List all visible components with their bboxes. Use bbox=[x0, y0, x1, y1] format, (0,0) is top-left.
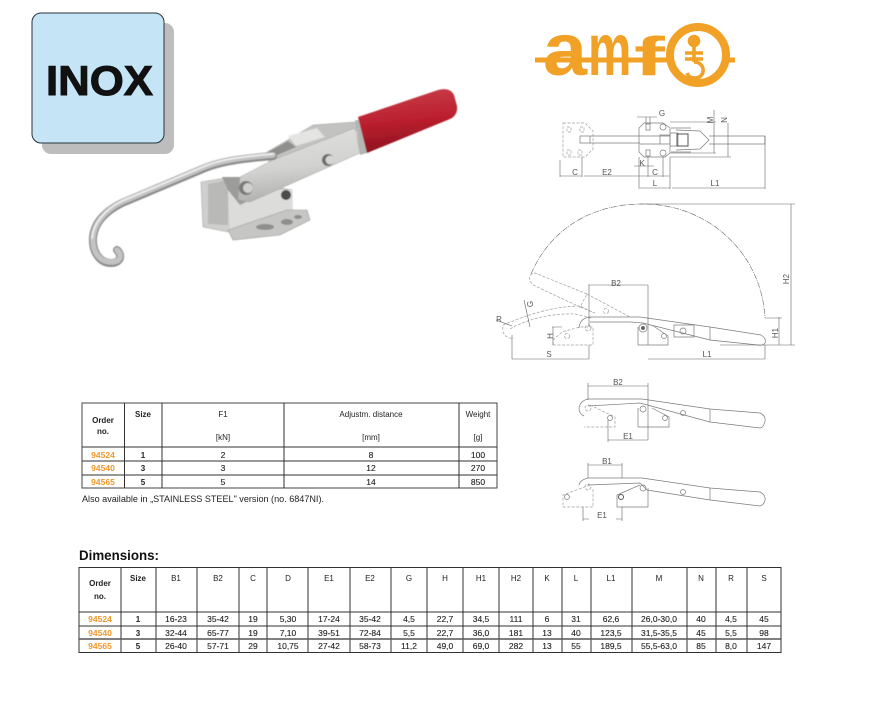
drawing: side view with swing arc bbox=[496, 204, 795, 359]
table: dimensions: R bbox=[728, 574, 734, 583]
table: dimensions: 55,5-63,0 bbox=[641, 641, 677, 651]
table: dimensions: L bbox=[574, 574, 579, 583]
table: dimensions: G bbox=[406, 574, 412, 583]
table: dimensions: 147 bbox=[757, 641, 771, 651]
table: specifications: 1 bbox=[141, 451, 146, 460]
table: dimensions: 6 bbox=[545, 614, 550, 624]
table: dimensions: 98 bbox=[759, 628, 769, 638]
table: specifications: 3 bbox=[221, 463, 226, 473]
drawing: top view: M bbox=[706, 116, 715, 123]
drawing: top view: K bbox=[639, 159, 645, 168]
table: dimensions: 85 bbox=[696, 641, 706, 651]
table: dimensions: 72-84 bbox=[359, 628, 381, 638]
drawing: top view: N bbox=[720, 117, 729, 123]
table: dimensions: 32-44 bbox=[165, 628, 187, 638]
heading: dimensions: Dimensions: bbox=[79, 547, 159, 563]
table: dimensions: 181 bbox=[509, 628, 523, 638]
table: specifications: Adjustm. distance bbox=[339, 410, 403, 419]
table: dimensions: 29 bbox=[248, 641, 258, 651]
table: dimensions bbox=[79, 567, 781, 652]
table: dimensions: 123,5 bbox=[600, 628, 622, 638]
table: dimensions: 39-51 bbox=[318, 628, 340, 638]
table: specifications: [kN] bbox=[216, 433, 230, 442]
drawing: top view: C bbox=[572, 168, 578, 177]
table: dimensions: S bbox=[761, 574, 767, 583]
table: specifications: 270 bbox=[471, 463, 485, 473]
table: dimensions: K bbox=[544, 574, 550, 583]
amf logo: m bbox=[588, 9, 631, 92]
table: dimensions: 19 bbox=[248, 614, 258, 624]
hook rod bbox=[92, 154, 273, 263]
table: specifications: 94565 bbox=[91, 477, 115, 487]
drawing: open position with B1 and E1 bbox=[563, 457, 765, 521]
table: dimensions: 19 bbox=[248, 628, 258, 638]
table: specifications: Order bbox=[92, 416, 114, 425]
table: dimensions: 62,6 bbox=[603, 614, 620, 624]
table: dimensions: 5,5 bbox=[725, 628, 737, 638]
amf logo: f bbox=[634, 26, 666, 87]
table: dimensions: Size bbox=[130, 574, 147, 583]
table: dimensions: E2 bbox=[365, 574, 375, 583]
table: dimensions: 55 bbox=[571, 641, 581, 651]
INOX badge: INOX bbox=[46, 57, 153, 104]
table: specifications: 100 bbox=[471, 450, 485, 460]
table: dimensions: 282 bbox=[509, 641, 523, 651]
table: dimensions: 31,5-35,5 bbox=[641, 628, 677, 638]
drawing: side view with swing arc: H2 bbox=[782, 273, 791, 284]
table: dimensions: 65-77 bbox=[207, 628, 229, 638]
table: dimensions: 13 bbox=[542, 641, 552, 651]
drawing: closed position with B2 and E1: B2 bbox=[613, 378, 623, 387]
drawing: side view with swing arc: L1 bbox=[703, 350, 712, 359]
table: dimensions: 11,2 bbox=[401, 641, 417, 651]
table: dimensions: 27-42 bbox=[318, 641, 340, 651]
drawing: open position with B1 and E1: B1 bbox=[602, 457, 612, 466]
drawing: top view: C bbox=[652, 168, 658, 177]
table: dimensions: 7,10 bbox=[280, 628, 297, 638]
table: dimensions: 49,0 bbox=[437, 641, 454, 651]
table: dimensions: 111 bbox=[510, 614, 523, 624]
table: dimensions: 35-42 bbox=[207, 614, 229, 624]
table: dimensions: Order bbox=[89, 579, 111, 588]
table: dimensions: 69,0 bbox=[473, 641, 490, 651]
table: dimensions: no. bbox=[94, 592, 106, 601]
table: dimensions: 26-40 bbox=[165, 641, 187, 651]
table: dimensions: 36,0 bbox=[473, 628, 490, 638]
table: dimensions: 40 bbox=[696, 614, 706, 624]
drawing: side view with swing arc: S bbox=[546, 350, 552, 359]
table: dimensions: 3 bbox=[136, 629, 141, 638]
table: dimensions: 10,75 bbox=[277, 641, 299, 651]
drawing: top view: G bbox=[659, 109, 665, 118]
table: specifications: no. bbox=[97, 427, 109, 436]
table: specifications: 3 bbox=[141, 464, 146, 473]
table: specifications: 850 bbox=[471, 477, 485, 487]
table: dimensions: 31 bbox=[571, 614, 581, 624]
table: specifications: 8 bbox=[369, 450, 374, 460]
table: dimensions: L1 bbox=[607, 574, 616, 583]
table: dimensions: 35-42 bbox=[359, 614, 381, 624]
drawing: top view: E2 bbox=[602, 168, 612, 177]
table: specifications: 12 bbox=[366, 463, 376, 473]
table: dimensions: B1 bbox=[171, 574, 181, 583]
note: stainless steel availability: Also available in „STAINLESS STEEL" version (no. 6847NI). bbox=[82, 494, 324, 504]
table: dimensions: B2 bbox=[213, 574, 223, 583]
table: dimensions: E1 bbox=[324, 574, 334, 583]
amf logo: a bbox=[543, 9, 588, 91]
table: dimensions: 34,5 bbox=[473, 614, 490, 624]
table: dimensions: 13 bbox=[542, 628, 552, 638]
table: dimensions: 94565 bbox=[88, 641, 112, 651]
drawing: side view with swing arc: G bbox=[526, 301, 535, 307]
table: dimensions: 1 bbox=[136, 615, 141, 624]
table: dimensions: 5,30 bbox=[280, 614, 297, 624]
table: dimensions: 40 bbox=[571, 628, 581, 638]
table: dimensions: H1 bbox=[476, 574, 487, 583]
table: specifications: 14 bbox=[366, 477, 376, 487]
table: dimensions: 94540 bbox=[88, 628, 112, 638]
table: specifications: F1 bbox=[218, 410, 228, 419]
table: dimensions: 58-73 bbox=[359, 641, 381, 651]
table: dimensions: M bbox=[656, 574, 663, 583]
drawing: side view with swing arc: H bbox=[546, 333, 555, 339]
drawing: closed position with B2 and E1: E1 bbox=[623, 432, 633, 441]
table: dimensions: 22,7 bbox=[437, 628, 454, 638]
table: specifications: [g] bbox=[474, 433, 482, 442]
table: dimensions: 16-23 bbox=[165, 614, 187, 624]
table: specifications: 5 bbox=[221, 477, 226, 487]
table: dimensions: H2 bbox=[511, 574, 522, 583]
table: dimensions: 45 bbox=[696, 628, 706, 638]
table: dimensions: 17-24 bbox=[318, 614, 340, 624]
table: dimensions: 189,5 bbox=[600, 641, 622, 651]
table: dimensions: 4,5 bbox=[725, 614, 737, 624]
table: specifications: [mm] bbox=[362, 433, 380, 442]
icon: chain hook bbox=[685, 36, 703, 78]
table: dimensions: 4,5 bbox=[403, 614, 415, 624]
drawing: side view with swing arc: R bbox=[496, 315, 502, 324]
table: dimensions: H bbox=[442, 574, 448, 583]
table: dimensions: 57-71 bbox=[207, 641, 229, 651]
drawing: side view with swing arc: B2 bbox=[611, 279, 621, 288]
table: dimensions: 26,0-30,0 bbox=[641, 614, 677, 624]
table: specifications: Size bbox=[135, 410, 152, 419]
table: dimensions: 22,7 bbox=[437, 614, 454, 624]
table: dimensions: 8,0 bbox=[725, 641, 737, 651]
table: dimensions: D bbox=[285, 574, 291, 583]
table: dimensions: 5,5 bbox=[403, 628, 415, 638]
drawing: top view: L bbox=[653, 179, 658, 188]
drawing: closed position with B2 and E1 bbox=[579, 378, 765, 442]
table: specifications: 94524 bbox=[91, 450, 115, 460]
table: specifications: 2 bbox=[221, 450, 226, 460]
table: specifications bbox=[82, 403, 497, 488]
drawing: top view: L1 bbox=[711, 179, 720, 188]
table: dimensions: 94524 bbox=[88, 614, 112, 624]
amf logo bbox=[535, 9, 735, 92]
INOX badge bbox=[32, 13, 174, 154]
drawing: top view bbox=[560, 109, 765, 189]
table: dimensions: C bbox=[250, 574, 256, 583]
table: dimensions: 5 bbox=[136, 642, 141, 651]
table: specifications: 5 bbox=[141, 478, 146, 487]
drawing: side view with swing arc: H1 bbox=[771, 327, 780, 338]
table: dimensions: 45 bbox=[759, 614, 769, 624]
product photo: latch clamp bbox=[92, 89, 457, 263]
table: specifications: 94540 bbox=[91, 463, 115, 473]
table: specifications: Weight bbox=[466, 410, 491, 419]
drawing: open position with B1 and E1: E1 bbox=[597, 511, 607, 520]
table: dimensions: N bbox=[698, 574, 704, 583]
